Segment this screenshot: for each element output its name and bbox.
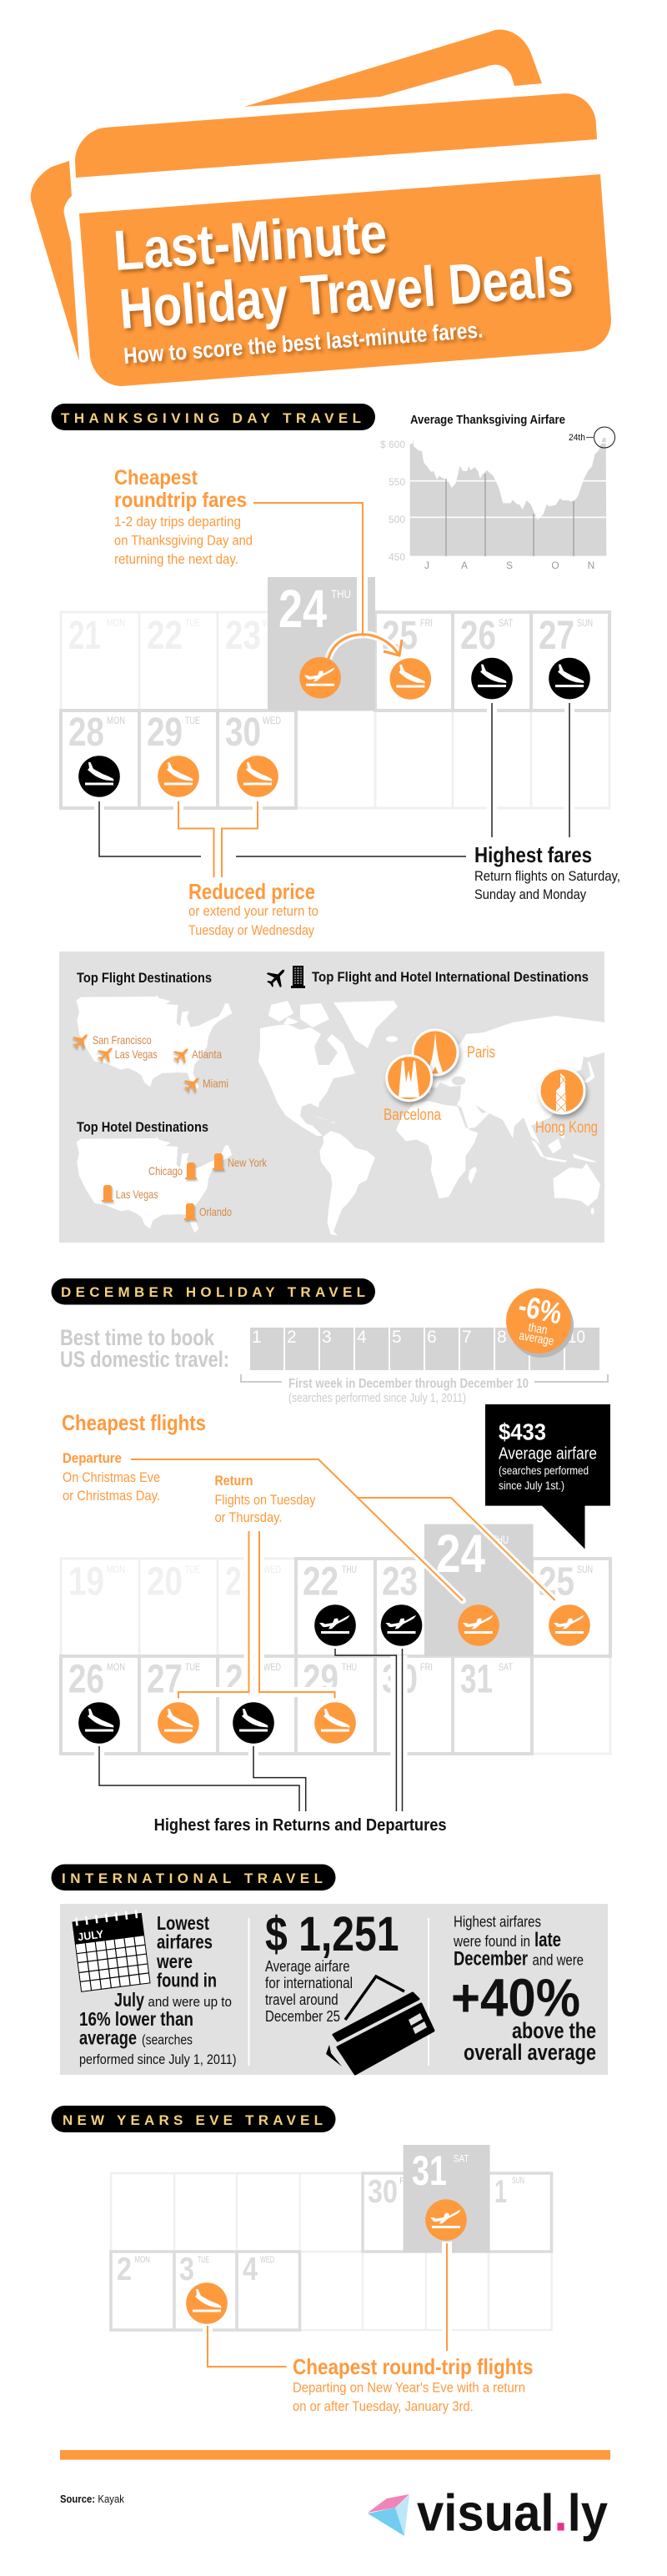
flight icons: thanksgiving <box>78 657 590 797</box>
calendar: december: 31 <box>460 1658 493 1702</box>
chart: booking days <box>241 1328 608 1405</box>
section heading: thanksgiving: THANKSGIVING DAY TRAVEL <box>61 410 361 426</box>
calendar: december: SUN <box>577 1564 593 1575</box>
callout: average airfare: (searches performed <box>499 1464 589 1477</box>
title: Last-Minute <box>112 201 389 283</box>
calendar: december: THU <box>342 1564 357 1575</box>
text: lowest airfares: found in <box>157 1970 217 1991</box>
text: lowest airfares: Lowest <box>157 1912 209 1934</box>
title: How to score the best last-minute fares. <box>123 317 484 369</box>
calendar: december: 19 <box>68 1559 104 1604</box>
callout: departure: or Christmas Day. <box>63 1488 160 1504</box>
map: flight destinations USA: San Francisco <box>93 1033 152 1047</box>
badge: minus 6 percent: -6% <box>515 1288 565 1331</box>
line chart: average thanksgiving airfare: 500 <box>389 514 405 525</box>
calendar: december: TUE <box>185 1661 200 1673</box>
calendar: december: 27 <box>147 1658 183 1702</box>
source: Source: <box>60 2493 95 2505</box>
callout: highest fares: Sunday and Monday <box>474 886 586 902</box>
calendar: december: 25 <box>539 1559 574 1604</box>
icon: hong kong <box>539 1067 585 1114</box>
calendar: december: 20 <box>147 1559 183 1604</box>
calendar: thanksgiving: SUN <box>577 617 593 629</box>
calendar: thanksgiving: 29 <box>147 711 183 755</box>
calendar: thanksgiving <box>61 577 609 813</box>
calendar: december: 23 <box>382 1559 418 1604</box>
calendar: new years eve: SAT <box>454 2153 469 2165</box>
calendar: thanksgiving: TUE <box>185 715 200 726</box>
calendar: december: SAT <box>499 1661 514 1673</box>
calendar: new years eve: F <box>399 2177 405 2187</box>
heading: cheapest flights: Cheapest flights <box>62 1410 206 1435</box>
line chart: average thanksgiving airfare: S <box>506 560 513 571</box>
calendar: new years eve: 4 <box>243 2252 258 2287</box>
text: lowest airfares: July <box>114 1989 144 2011</box>
chart: booking days: 3 <box>322 1328 332 1347</box>
calendar: december: MON <box>107 1661 125 1673</box>
calendar: december: 30 <box>382 1658 418 1702</box>
icon: paris <box>412 1029 459 1077</box>
calendar: thanksgiving: TUE <box>185 617 200 629</box>
calendar: new years eve: SUN <box>512 2176 524 2186</box>
chart: booking days: First week in December through December 10 <box>288 1377 529 1391</box>
text: lowest airfares: (searches <box>142 2032 193 2048</box>
title: Holiday Travel Deals <box>118 244 575 341</box>
callout: cheapest round-trip flights <box>293 2354 534 2414</box>
callout: departure <box>63 1450 160 1504</box>
calendar: december: TUE <box>185 1564 200 1575</box>
calendar: thanksgiving: MON <box>107 715 125 726</box>
badge: minus 6 percent: than <box>527 1320 549 1338</box>
calendar: thanksgiving: 25 <box>382 614 418 658</box>
line chart: average thanksgiving airfare: 24th <box>569 433 585 443</box>
calendar: thanksgiving: SAT <box>499 617 514 629</box>
section heading: international <box>52 1865 335 1891</box>
calendar: new years eve: MON <box>135 2255 150 2265</box>
line chart: average thanksgiving airfare: O <box>551 560 559 571</box>
calendar: december: WED <box>263 1661 281 1673</box>
callout: cheapest round-trip flights: Cheapest round-trip flights <box>293 2354 534 2379</box>
calendar: december: 26 <box>68 1658 104 1702</box>
footer bar <box>60 2450 610 2460</box>
calendar: thanksgiving: WED <box>263 715 281 726</box>
text: lowest airfares: average <box>79 2027 137 2049</box>
icon: july calendar <box>72 1909 150 1991</box>
chart: booking days: 4 <box>357 1328 367 1347</box>
connectors: highest and reduced fares <box>99 703 569 877</box>
callout: highest fares: Return flights on Saturday, <box>474 868 620 884</box>
calendar: december: 24 <box>436 1524 485 1584</box>
chart: booking days: (searches performed since July 1, 2011) <box>288 1391 466 1405</box>
callout: reduced price: Tuesday or Wednesday <box>188 922 314 938</box>
callout: cheapest roundtrip fares: returning the next day. <box>114 551 238 567</box>
text: lowest airfares: 16% lower than <box>79 2008 193 2030</box>
section heading: december <box>52 1278 375 1304</box>
section heading: new years eve: NEW YEARS EVE TRAVEL <box>63 2112 323 2128</box>
calendar: new years eve: 30 <box>368 2174 398 2210</box>
panel: international <box>60 1904 608 2075</box>
section heading: thanksgiving <box>52 404 375 430</box>
calendar: december: MON <box>107 1564 125 1575</box>
callout: cheapest roundtrip fares: on Thanksgiving Day and <box>114 532 253 549</box>
calendar: new years eve: 2 <box>117 2252 132 2287</box>
map: flight destinations USA <box>70 995 232 1096</box>
map: flight destinations USA: Miami <box>203 1077 228 1090</box>
section heading: international: INTERNATIONAL TRAVEL <box>62 1870 323 1886</box>
icon: plane and hotel <box>263 963 305 992</box>
calendar: new years eve: WED <box>260 2255 274 2265</box>
chart: booking days: 5 <box>392 1328 402 1347</box>
connectors: new years eve <box>208 2243 447 2367</box>
map: hotel destinations USA: New York <box>228 1156 268 1169</box>
calendar: thanksgiving: 30 <box>225 711 261 755</box>
text: lowest airfares: were <box>156 1951 193 1972</box>
heading: best time to book <box>60 1325 229 1372</box>
callout: highest fares: Highest fares <box>474 842 592 867</box>
calendar: thanksgiving: 26 <box>460 614 496 658</box>
stat: highest airfares plus 40 percent: +40% <box>451 1968 580 2028</box>
title <box>112 201 575 369</box>
stat: highest airfares plus 40 percent: were found in <box>453 1933 530 1950</box>
callout: cheapest round-trip flights: Departing on New Year's Eve with a return <box>293 2380 525 2396</box>
stat: highest airfares plus 40 percent: Highest airfares <box>454 1914 541 1931</box>
stat: highest airfares plus 40 percent: overall average <box>464 2040 596 2065</box>
stat: highest airfares plus 40 percent: above the <box>512 2018 596 2043</box>
calendar: thanksgiving: FRI <box>420 617 433 629</box>
callout: reduced price <box>188 879 318 938</box>
calendar: december <box>61 1459 610 1760</box>
calendar: thanksgiving: 21 <box>68 614 101 658</box>
badge: minus 6 percent <box>506 1288 574 1358</box>
map: flight destinations USA: Atlanta <box>192 1047 222 1061</box>
callout: average airfare: since July 1st.) <box>499 1479 564 1492</box>
calendar: thanksgiving: MON <box>107 617 125 629</box>
label: paris: Paris <box>467 1044 495 1062</box>
callout: return <box>215 1473 316 1525</box>
chart: booking days: 10 <box>568 1328 585 1347</box>
calendar: thanksgiving: WED <box>263 617 279 629</box>
line chart: average thanksgiving airfare: J <box>424 560 429 571</box>
callout: average airfare: Average airfare <box>499 1445 597 1464</box>
stat: highest airfares plus 40 percent <box>451 1914 596 2065</box>
calendar: thanksgiving: 28 <box>68 711 104 755</box>
map: flight destinations USA: Las Vegas <box>115 1047 158 1061</box>
callout: cheapest roundtrip fares <box>114 466 253 567</box>
chart: booking days: 8 <box>497 1328 507 1347</box>
calendar: december: 28 <box>225 1658 261 1702</box>
callout: departure: Departure <box>63 1450 122 1466</box>
callout: cheapest roundtrip fares: 1-2 day trips departing <box>114 514 241 530</box>
badge: minus 6 percent: average <box>518 1328 555 1348</box>
map: hotel destinations USA <box>77 1137 268 1233</box>
line chart: average thanksgiving airfare: 450 <box>389 551 405 563</box>
calendar: thanksgiving: 27 <box>539 614 574 658</box>
calendar: december: 21 <box>225 1559 258 1604</box>
stat: highest airfares plus 40 percent: December <box>454 1948 528 1971</box>
callout: cheapest roundtrip fares: roundtrip fares <box>114 489 247 512</box>
stat: average international airfare <box>265 1907 399 2025</box>
flight icons: december <box>78 1604 590 1744</box>
chart: booking days: 7 <box>462 1328 472 1347</box>
label: highest fares in returns and departures: Highest fares in Returns and Departures <box>154 1816 447 1835</box>
line chart: average thanksgiving airfare: 550 <box>389 476 405 488</box>
calendar: thanksgiving: THU <box>331 587 351 600</box>
stat: highest airfares plus 40 percent: and were <box>532 1952 584 1969</box>
text: lowest airfares: airfares <box>157 1931 213 1953</box>
heading: international destinations: Top Flight and Hotel International Destinations <box>312 969 589 985</box>
calendar: new years eve: 31 <box>412 2147 447 2194</box>
source <box>60 2493 124 2505</box>
callout: cheapest roundtrip fares: Cheapest <box>114 466 198 490</box>
map: hotel destinations USA: Chicago <box>148 1164 183 1178</box>
callout: return: Flights on Tuesday <box>215 1492 316 1508</box>
panel: destinations <box>59 952 604 1243</box>
callout: cheapest round-trip flights: on or after Tuesday, January 3rd. <box>293 2398 474 2414</box>
calendar: december: WED <box>263 1564 281 1575</box>
stat: average international airfare: December 25 <box>265 2008 340 2025</box>
callout: reduced price: Reduced price <box>188 879 315 904</box>
calendar: new years eve: 1 <box>494 2174 507 2210</box>
callout: return: Return <box>215 1473 253 1489</box>
logo: visual.ly: visual.ly <box>417 2485 608 2543</box>
calendar: new years eve <box>111 2145 552 2335</box>
source: Kayak <box>98 2493 124 2505</box>
calendar: new years eve: 3 <box>179 2252 194 2287</box>
line chart: average thanksgiving airfare <box>380 413 615 571</box>
line chart: average thanksgiving airfare: N <box>588 560 594 571</box>
calendar: thanksgiving: 23 <box>225 614 261 658</box>
calendar: december: 29 <box>303 1658 339 1702</box>
heading: top flight destinations: Top Flight Destinations <box>77 970 212 986</box>
map: world <box>258 1001 604 1236</box>
callout: return: or Thursday. <box>215 1509 282 1525</box>
chart: booking days: 1 <box>252 1328 262 1347</box>
flight icons: new years eve <box>186 2199 467 2324</box>
calendar: thanksgiving: 22 <box>147 614 183 658</box>
calendar: december: THU <box>342 1661 357 1673</box>
callout: average airfare: $433 <box>499 1419 546 1445</box>
title card graphic <box>31 30 611 386</box>
heading: best time to book: Best time to book <box>60 1325 215 1350</box>
calendar: december: FRI <box>420 1661 433 1673</box>
callout: highest fares <box>474 842 620 902</box>
stat: average international airfare: $ 1,251 <box>265 1907 399 1961</box>
heading: best time to book: US domestic travel: <box>60 1347 229 1372</box>
stat: average international airfare: Average airfare <box>265 1958 350 1975</box>
label: barcelona: Barcelona <box>384 1107 441 1124</box>
connector: cheapest fares arrow <box>253 503 402 659</box>
label: hong kong: Hong Kong <box>535 1119 598 1137</box>
stat: average international airfare: for international <box>265 1975 353 1991</box>
section heading: december: DECEMBER HOLIDAY TRAVEL <box>61 1284 365 1300</box>
stat: highest airfares plus 40 percent: late <box>534 1929 561 1951</box>
chart: booking days: 2 <box>287 1328 297 1347</box>
calendar: december: 22 <box>303 1559 339 1604</box>
chart: booking days: 6 <box>427 1328 437 1347</box>
calendar: december: THU <box>492 1533 509 1546</box>
stat: average international airfare: travel around <box>265 1991 339 2008</box>
text: lowest airfares: performed since July 1, 2011) <box>79 2051 237 2067</box>
line chart: average thanksgiving airfare: A <box>461 560 468 571</box>
connectors: highest fares december <box>99 1649 402 1811</box>
calendar: thanksgiving: 24 <box>278 579 327 639</box>
connectors: departure and return <box>131 1459 555 1698</box>
map: hotel destinations USA: Las Vegas <box>116 1188 158 1201</box>
line chart: average thanksgiving airfare: $ 600 <box>380 439 405 450</box>
icon: credit cards <box>326 1976 434 2074</box>
heading: top hotel destinations: Top Hotel Destinations <box>77 1119 208 1135</box>
line chart: average thanksgiving airfare: Average Thanksgiving Airfare <box>410 413 565 427</box>
text: lowest airfares <box>79 1912 237 2067</box>
callout: departure: On Christmas Eve <box>63 1469 160 1485</box>
map: hotel destinations USA: Orlando <box>199 1205 232 1218</box>
callout: average airfare <box>485 1404 610 1549</box>
section heading: new years eve <box>52 2106 335 2132</box>
calendar: new years eve: TUE <box>198 2255 209 2265</box>
text: lowest airfares: and were up to <box>148 1994 232 2010</box>
callout: reduced price: or extend your return to <box>188 903 318 919</box>
icon: barcelona <box>385 1054 433 1102</box>
icon: july calendar: JULY <box>77 1927 104 1943</box>
